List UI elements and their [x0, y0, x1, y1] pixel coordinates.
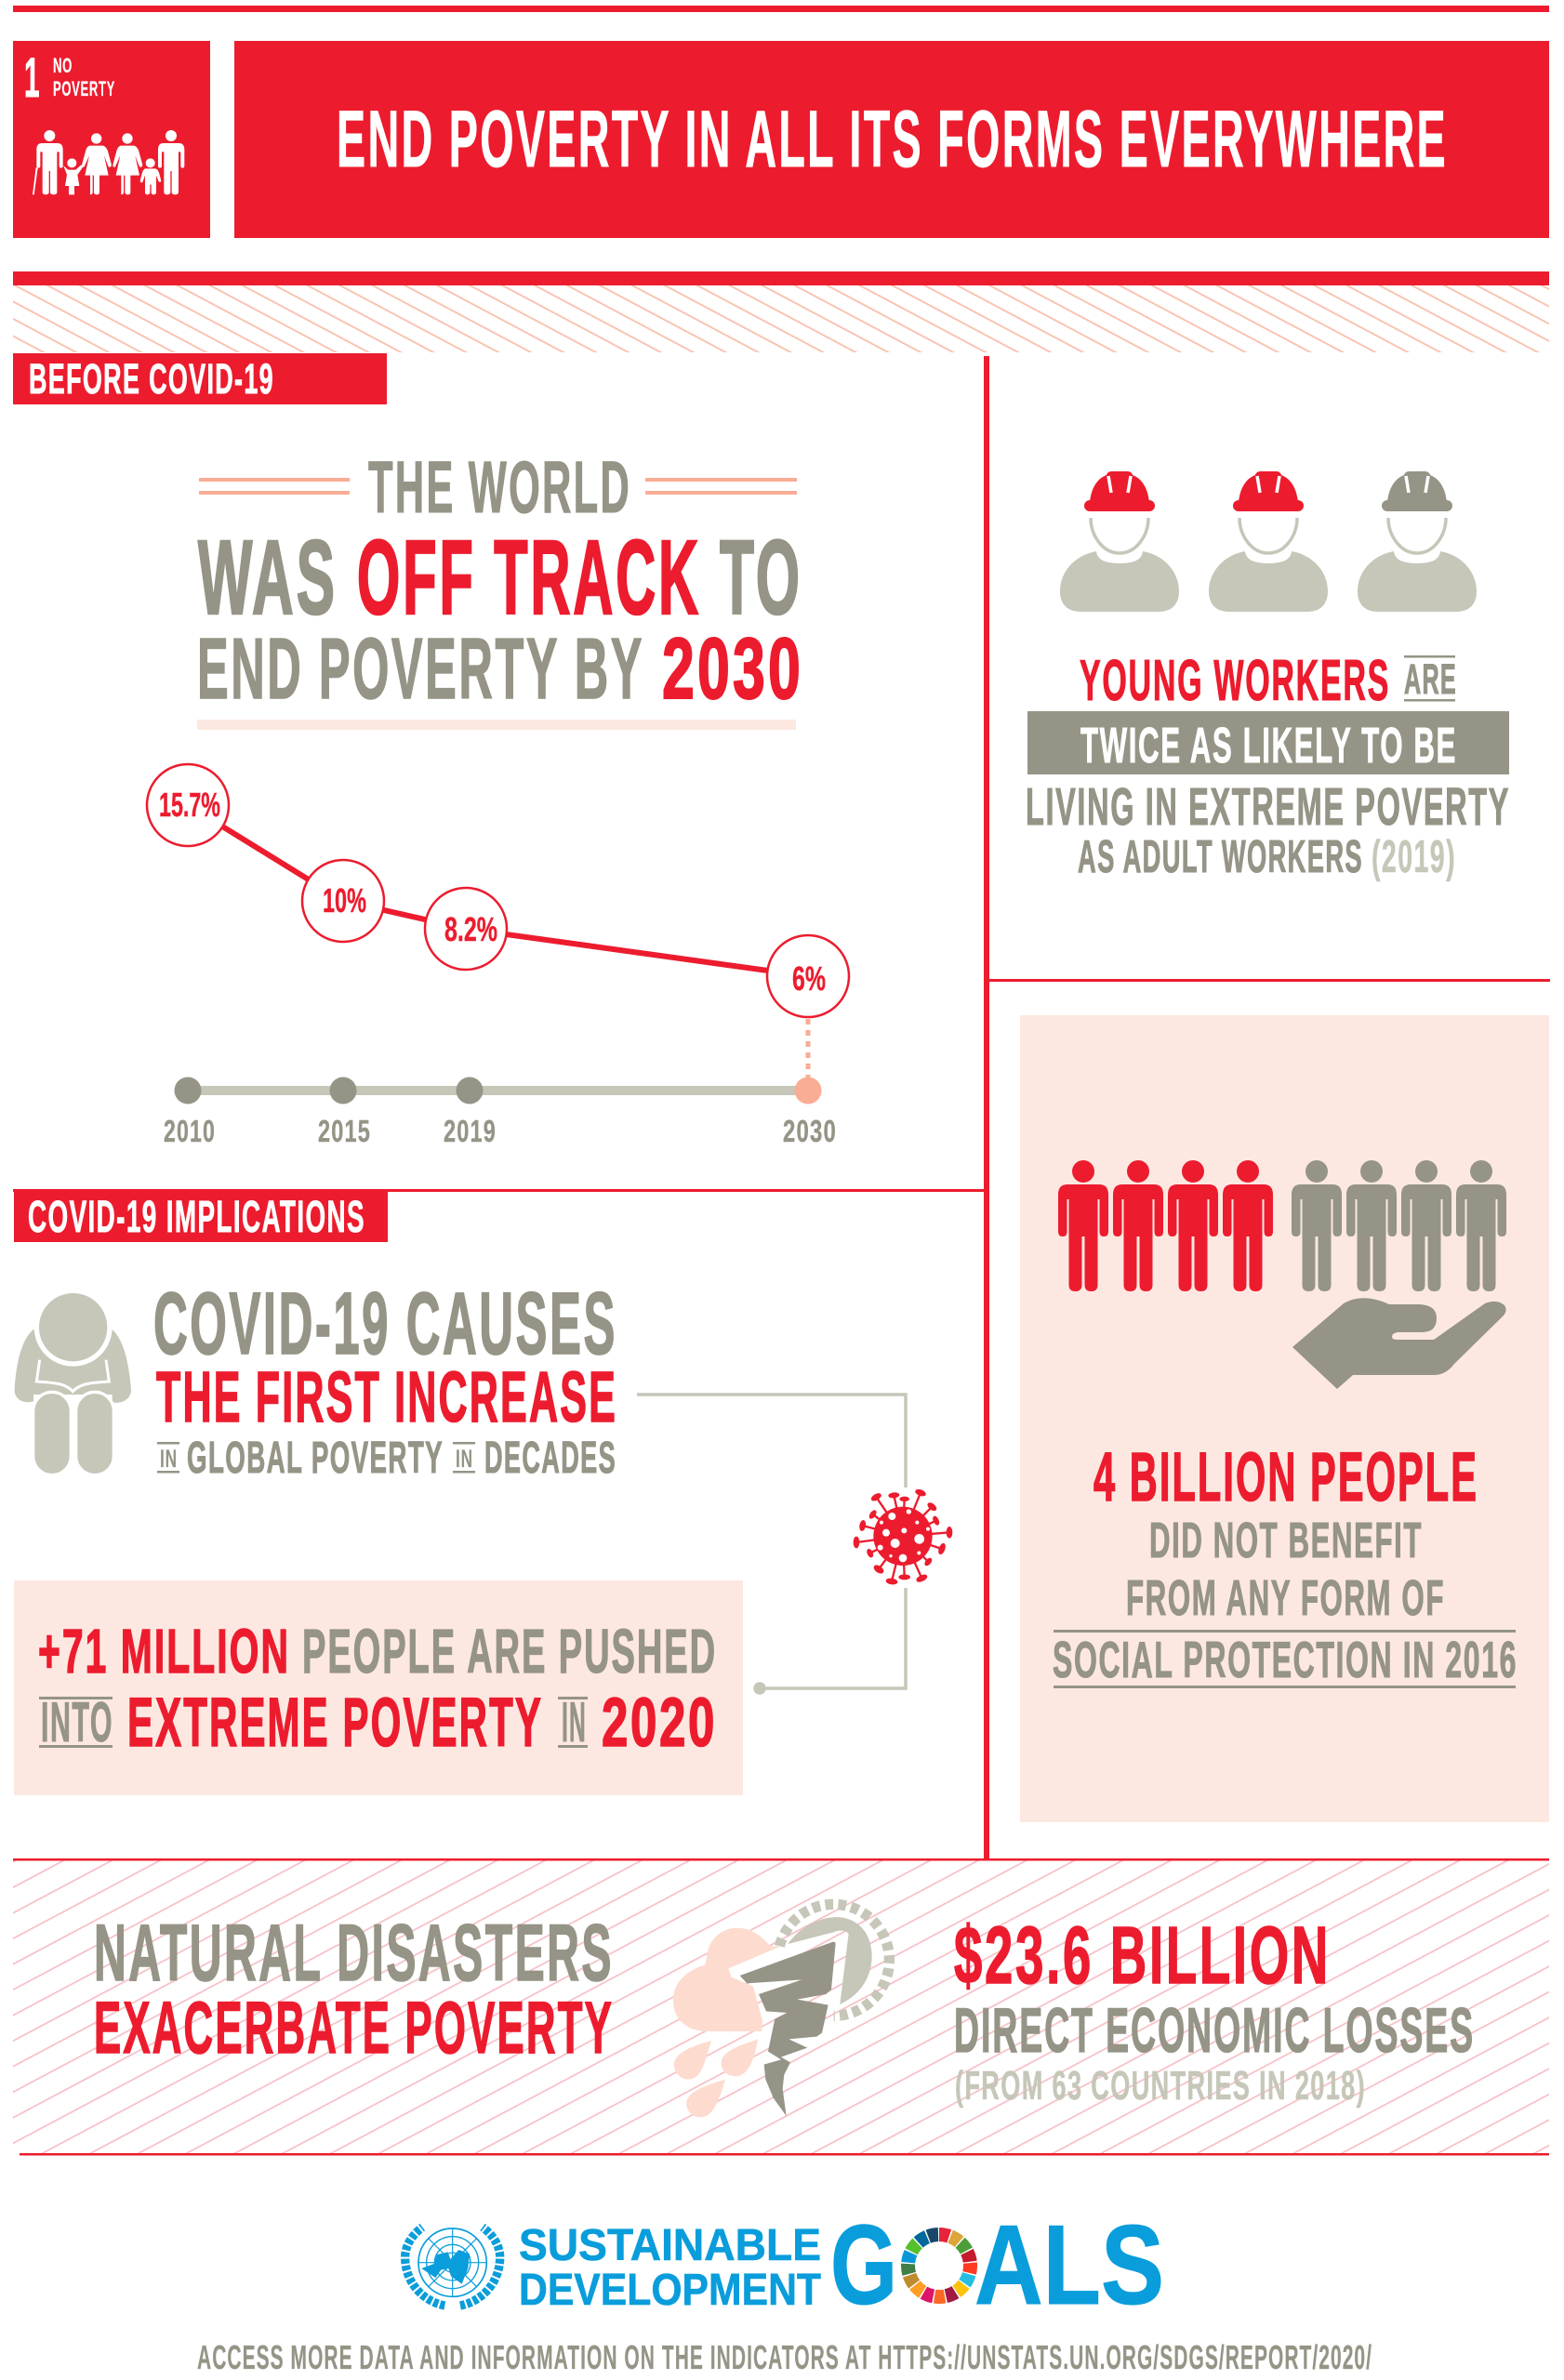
- goal 1 icon: [13, 41, 210, 238]
- logo: sustainable development goals: G: [830, 2202, 897, 2328]
- heading: the world was off track: THE WORLD: [368, 446, 631, 528]
- icon: open hand: [1292, 1298, 1506, 1389]
- section label: before covid-19: BEFORE COVID-19: [29, 355, 274, 403]
- line chart: poverty rate: [147, 764, 849, 1148]
- icon: seated person: [15, 1289, 131, 1475]
- red band: [13, 271, 1549, 285]
- callout: 71 million: INTO: [41, 1691, 113, 1753]
- text: young workers: [1026, 648, 1510, 882]
- section label: covid-19 implications: COVID-19 IMPLICATIONS: [28, 1193, 365, 1242]
- icon: un emblem: [405, 2228, 500, 2306]
- text: covid-19 causes: IN: [160, 1445, 178, 1473]
- title banner: [234, 41, 1549, 238]
- icons: three workers: [1060, 471, 1477, 612]
- text: covid-19 causes: THE FIRST INCREASE: [156, 1357, 617, 1437]
- line chart: poverty rate: 2010: [164, 1114, 216, 1148]
- text: economic losses: $23.6 BILLION: [954, 1911, 1331, 2001]
- text: covid-19 causes: GLOBAL POVERTY: [187, 1434, 444, 1483]
- line chart: poverty rate: 8.2%: [444, 910, 497, 948]
- line chart: poverty rate: 10%: [323, 881, 366, 919]
- logo: sustainable development goals: SUSTAINABLE: [519, 2221, 821, 2270]
- heading: the world was off track: END POVERTY BY: [197, 620, 644, 717]
- section rule: covid-19 implications: [13, 1189, 984, 1192]
- callout: 71 million: +71 MILLION: [38, 1617, 290, 1686]
- callout: 71 million: EXTREME POVERTY: [127, 1684, 543, 1761]
- goal 1 icon: POVERTY: [53, 77, 115, 100]
- text: covid-19 causes: COVID-19 CAUSES: [153, 1275, 617, 1373]
- callout: 71 million: PEOPLE ARE PUSHED: [302, 1617, 717, 1686]
- heading: the world was off track: OFF TRACK: [357, 519, 701, 636]
- text: natural disasters exacerbate poverty: NATURAL DISASTERS: [94, 1909, 614, 1998]
- panel: natural disasters: [13, 1858, 1549, 2155]
- top rule: [13, 6, 1549, 12]
- icon: sdg colour wheel: [908, 2235, 971, 2296]
- text: covid-19 causes: DECADES: [484, 1434, 616, 1483]
- line chart: poverty rate: 6%: [792, 959, 826, 998]
- callout: 71 million: IN: [562, 1691, 587, 1753]
- line chart: poverty rate: 2015: [318, 1114, 371, 1148]
- text: natural disasters exacerbate poverty: EXACERBATE POVERTY: [94, 1987, 614, 2069]
- logo: sustainable development goals: ALS: [974, 2202, 1164, 2328]
- goal 1 icon: NO: [53, 54, 73, 77]
- text: natural disasters exacerbate poverty: [94, 1909, 614, 2069]
- text: covid-19 causes: IN: [456, 1445, 473, 1473]
- connector line: [637, 1395, 906, 1693]
- heading: the world was off track: [197, 446, 803, 730]
- panel: social protection: [1020, 1015, 1549, 1822]
- icon: virus: [854, 1488, 952, 1585]
- heading: the world was off track: WAS: [198, 519, 338, 636]
- callout: 71 million: [14, 1580, 743, 1795]
- heading: the world was off track: 2030: [662, 620, 803, 717]
- line chart: poverty rate: 2030: [783, 1114, 837, 1148]
- logo: sustainable development goals: [405, 2202, 1164, 2328]
- line chart: poverty rate: 2019: [444, 1114, 497, 1148]
- goal 1 icon: 1: [24, 46, 41, 109]
- vertical divider: [984, 356, 989, 1860]
- icons: eight people: [1058, 1160, 1506, 1291]
- horizontal divider right: [989, 979, 1550, 982]
- line chart: poverty rate: 15.7%: [159, 786, 220, 824]
- text: covid-19 causes: [153, 1275, 617, 1483]
- icon: storm: [673, 1904, 889, 2117]
- text: economic losses: [954, 1911, 1475, 2109]
- callout: 71 million: 2020: [602, 1684, 717, 1761]
- text: 4 billion people: [1053, 1438, 1518, 1688]
- logo: sustainable development goals: DEVELOPMENT: [519, 2266, 821, 2315]
- section label: covid-19 implications: [14, 1191, 388, 1242]
- text: young workers: ARE: [1404, 655, 1457, 703]
- heading: the world was off track: TO: [720, 519, 802, 636]
- hatched band: [13, 285, 1549, 352]
- text: young workers: (2019): [1372, 831, 1456, 882]
